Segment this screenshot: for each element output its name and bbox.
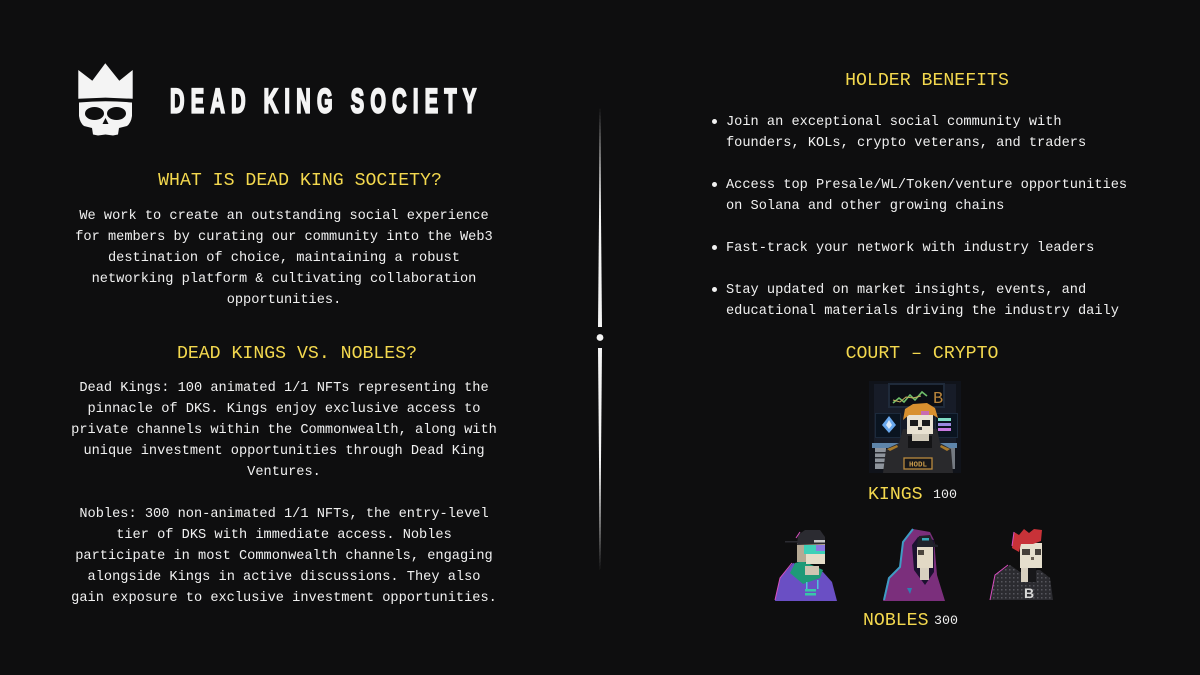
- benefit: opportunities: Access top Presale/WL/Token/venture opportunities on Solana and other growing chains: [726, 178, 1127, 214]
- illustration: noble two, purple hood: [883, 528, 945, 601]
- nobles number: 300: [934, 613, 958, 628]
- text block: nobles description: Nobles: 300 non-animated 1/1 NFTs, the entry-level tier of DKS with immediate access. Nobles participate in most Commonwealth channels, engaging alongside Kings in active discussions. They also gain exposure to exclusive investment opportunities.: [71, 507, 497, 606]
- kings label: KINGS: [868, 485, 923, 505]
- text block: what is dead king society: We work to create an outstanding social experience for members by curating our community into the Web3 destination of choice, maintaining a robust networking platform & cultivating collaboration opportunities.: [75, 209, 493, 308]
- logo wordmark: DEAD KING SOCIETY: [170, 81, 476, 120]
- heading: court crypto: COURT – CRYPTO: [846, 344, 998, 364]
- center divider: [596, 109, 604, 570]
- text block: dead kings description: Dead Kings: 100 animated 1/1 NFTs representing the pinnacle of DKS. Kings enjoy exclusive access to private channels within the Commonwealth, along with unique investment opportunities through Dead King Ventures.: [71, 381, 497, 480]
- illustration: noble three, red hair: B: [1024, 585, 1034, 601]
- illustration: king skeleton: [869, 381, 961, 473]
- heading: dead kings vs nobles: DEAD KINGS VS. NOBLES?: [177, 344, 417, 364]
- logo: crowned skull: [78, 63, 133, 136]
- benefit: community: Join an exceptional social community with founders, KOLs, crypto veterans, and traders: [726, 115, 1086, 151]
- label: nobles count: [863, 611, 958, 631]
- list: holder benefits: [712, 115, 1127, 319]
- nobles label: NOBLES: [863, 611, 928, 631]
- illustration: noble three, red hair: [990, 529, 1053, 601]
- kings number: 100: [933, 487, 957, 502]
- heading: what is dead king society: WHAT IS DEAD KING SOCIETY?: [158, 171, 442, 191]
- benefit: insights: Stay updated on market insights, events, and educational materials driving the industry daily: [726, 283, 1119, 319]
- label: kings count: [868, 485, 957, 505]
- benefit: network: Fast-track your network with industry leaders: [726, 241, 1094, 256]
- illustration: king skeleton: HODL: [909, 462, 927, 470]
- illustration: noble one, green hood: [774, 530, 837, 601]
- heading: holder benefits: HOLDER BENEFITS: [845, 71, 1009, 91]
- illustration: king skeleton: B: [933, 390, 943, 409]
